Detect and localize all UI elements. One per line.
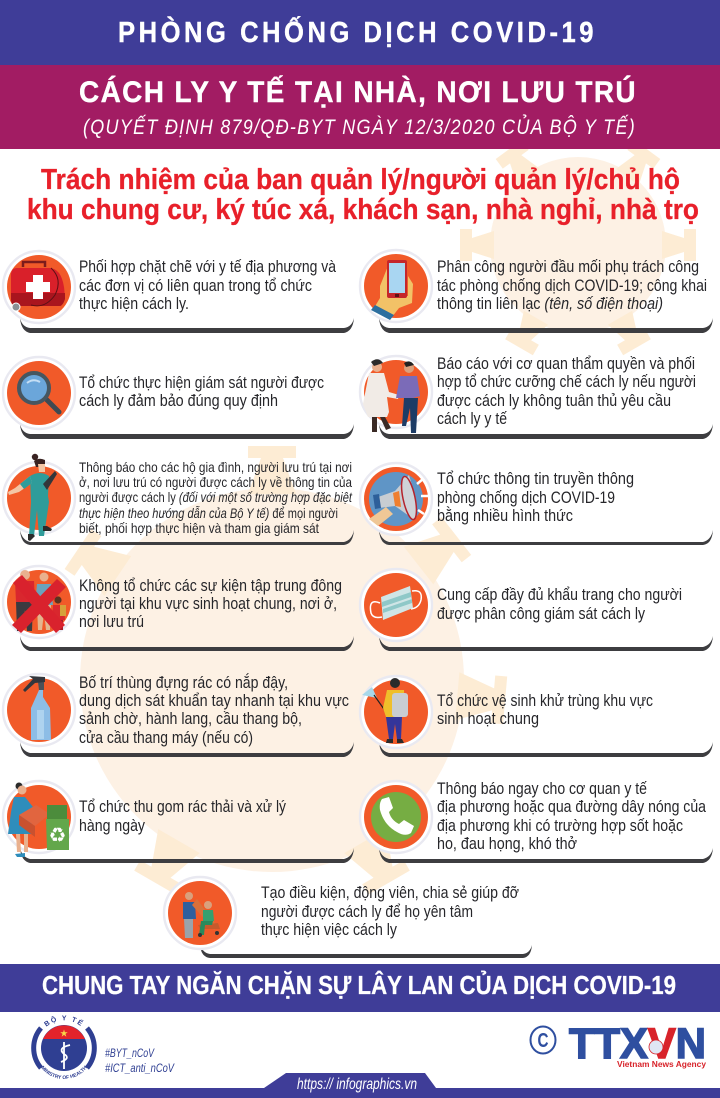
text: cửa cầu thang máy (nếu có) — [79, 729, 253, 747]
text: Cung cấp đầy đủ khẩu trang cho người — [437, 586, 682, 604]
card 13: encouragement — [164, 877, 532, 958]
icon: doctor and man — [360, 356, 432, 433]
text — [437, 586, 682, 623]
text: người được cách ly để họ yên tâm — [261, 903, 473, 921]
text: bằng nhiều hình thức — [437, 506, 573, 525]
hashtags — [105, 1046, 175, 1075]
text: biết, phối hợp thực hiện và tham gia giám sát — [79, 520, 319, 536]
hashtags: #ICT_anti_nCoV — [105, 1061, 175, 1075]
card 10: masks — [360, 569, 713, 651]
text: thông tin liên lạc (tên, số điện thoại) — [437, 295, 663, 313]
logo: TTXVN: C — [538, 1030, 548, 1052]
logo: Ministry of Health: MINISTRY OF HEALTH — [41, 1066, 87, 1079]
text — [79, 673, 349, 747]
icon: medical bag — [3, 251, 75, 323]
icon: medic and patient — [164, 877, 236, 949]
text: Thông báo cho các hộ gia đình, người lưu trú tại nơi — [79, 459, 352, 475]
logo: Ministry of Health: BỘ Y TẾ — [44, 1016, 84, 1026]
hashtags: #BYT_nCoV — [105, 1046, 155, 1060]
card 2: supervision — [3, 357, 354, 439]
text: Tổ chức thực hiện giám sát người được — [79, 374, 324, 392]
card 4: no gatherings — [3, 566, 354, 651]
text — [79, 577, 342, 631]
text: địa phương khi có trường hợp sốt hoặc — [437, 817, 683, 835]
icon: telephone — [360, 781, 432, 853]
text: Bố trí thùng đựng rác có nắp đậy, — [79, 673, 288, 692]
icon: crossed out family — [3, 566, 75, 638]
text: được cách ly không tuân thủ yêu cầu — [437, 392, 671, 410]
text: thực hiện theo hướng dẫn của Bộ Y tế) để mọi người — [79, 505, 338, 521]
subtitle band: (QUYẾT ĐỊNH 879/QĐ-BYT NGÀY 12/3/2020 CỦA BỘ Y TẾ) — [83, 115, 636, 139]
icon: woman with recycling bin — [3, 781, 75, 857]
card 8: report to authorities — [360, 355, 713, 439]
icon: spray bottle — [3, 674, 75, 746]
subtitle band: CÁCH LY Y TẾ TẠI NHÀ, NƠI LƯU TRÚ — [79, 75, 637, 109]
text: hàng ngày — [79, 817, 146, 835]
text: nơi lưu trú — [79, 613, 144, 631]
text: thực hiện cách ly. — [79, 295, 189, 313]
text — [437, 355, 696, 428]
icon: hand holding phone — [360, 250, 432, 322]
logo: TTXVN: TTXVN — [569, 1020, 706, 1068]
text: các đơn vị có liên quan trong tổ chức — [79, 277, 312, 295]
text — [437, 470, 634, 525]
card 11: disinfection — [360, 676, 713, 757]
text: cách ly y tế — [437, 410, 507, 428]
card 12: hotline — [360, 780, 713, 863]
top title band: PHÒNG CHỐNG DỊCH COVID-19 — [118, 15, 597, 49]
text: dung dịch sát khuẩn tay nhanh tại khu vực — [79, 692, 349, 710]
text: người tại khu vực sinh hoạt chung, nơi ở, — [79, 595, 337, 613]
icon: magnifier — [3, 357, 75, 429]
text — [79, 798, 287, 835]
red heading — [27, 164, 699, 226]
card 5: bins and sanitiser — [3, 673, 354, 757]
text: Phối hợp chặt chẽ với y tế địa phương và — [79, 258, 337, 276]
text — [261, 884, 519, 939]
text — [79, 374, 324, 410]
text: Thông báo ngay cho cơ quan y tế — [437, 780, 647, 798]
text — [79, 459, 353, 536]
icon: disinfection worker — [360, 676, 432, 748]
card 3: notification — [3, 454, 354, 545]
slogan band — [0, 964, 720, 1012]
text: ho, đau họng, khó thở — [437, 835, 577, 853]
text — [79, 258, 337, 313]
text: được phân công giám sát cách ly — [437, 605, 646, 623]
text: Tổ chức vệ sinh khử trùng khu vực — [437, 692, 653, 710]
card 1: coordination — [3, 251, 354, 333]
text: Tạo điều kiện, động viên, chia sẻ giúp đỡ — [261, 884, 519, 902]
text: Tổ chức thu gom rác thải và xử lý — [79, 798, 287, 816]
logo: TTXVN: Vietnam News Agency — [617, 1060, 707, 1069]
icon: woman with recycling bin: ♻ — [50, 827, 65, 844]
background: small faint virus — [460, 140, 696, 355]
text — [437, 258, 707, 313]
icon: nurse — [3, 454, 75, 541]
bottom URL band — [0, 1073, 720, 1098]
logo: Ministry of Health: ★ — [60, 1029, 68, 1038]
text: Tổ chức thông tin truyền thông — [437, 470, 634, 488]
text: Không tổ chức các sự kiện tập trung đông — [79, 577, 342, 595]
card 6: waste collection — [3, 781, 354, 863]
text: thực hiện việc cách ly — [261, 921, 398, 939]
text: phòng chống dịch COVID-19 — [437, 489, 615, 507]
icon: face mask — [360, 569, 432, 641]
logo: Ministry of Health — [31, 1016, 97, 1079]
text — [437, 780, 707, 853]
top title band — [0, 0, 720, 65]
text: người được cách ly (đối với một số trường hợp đặc biệt — [79, 489, 353, 505]
subtitle band — [0, 65, 720, 149]
card 7: assign contact person — [360, 250, 713, 333]
text — [437, 692, 653, 728]
icon: megaphone — [360, 463, 432, 535]
card 9: communication — [360, 463, 713, 545]
text: sảnh chờ, hành lang, cầu thang bộ, — [79, 710, 302, 728]
text: ở, nơi lưu trú có người được cách ly về thông tin của — [79, 474, 352, 490]
background: large faint virus — [65, 446, 507, 895]
bottom URL band: https:// infographics.vn — [297, 1076, 417, 1093]
text: sinh hoạt chung — [437, 710, 539, 728]
text: cách ly đảm bảo đúng quy định — [79, 392, 278, 410]
